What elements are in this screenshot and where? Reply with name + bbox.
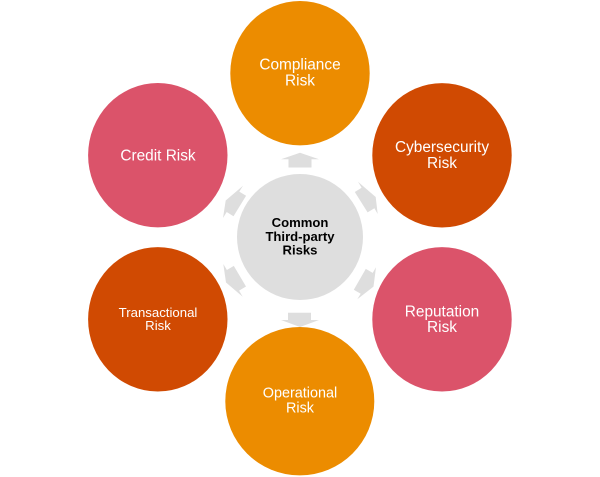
circle: cybersecurity risk: Risk (427, 155, 457, 172)
arrow: to compliance risk (281, 153, 319, 168)
circle: compliance risk: Compliance (259, 57, 341, 74)
circle: credit risk (88, 83, 228, 227)
circle: credit risk: Credit Risk (120, 147, 196, 164)
center circle: common third-party risks: Risks (283, 242, 317, 257)
circle: operational risk: Operational (263, 386, 337, 402)
circle: compliance risk: Risk (285, 73, 315, 90)
circle: transactional risk (88, 247, 228, 392)
circle: operational risk (225, 327, 374, 475)
circle: reputation risk (372, 247, 512, 392)
circle: compliance risk (230, 1, 370, 145)
center circle: common third-party risks: Common (272, 215, 328, 230)
arrow: to transactional risk (223, 264, 246, 297)
arrow: to reputation risk (354, 267, 376, 299)
circle: reputation risk: Risk (427, 319, 457, 336)
circle: cybersecurity risk: Cybersecurity (395, 139, 489, 156)
circle: transactional risk: Risk (145, 318, 171, 333)
arrow: to cybersecurity risk (355, 182, 378, 214)
circle: reputation risk: Reputation (405, 304, 479, 321)
center circle: common third-party risks (237, 174, 363, 300)
arrow: to operational risk (281, 313, 319, 327)
circle: cybersecurity risk (372, 83, 512, 228)
center circle: common third-party risks: Third-party (265, 229, 335, 244)
arrow: to credit risk (223, 186, 246, 218)
circle: transactional risk: Transactional (119, 305, 197, 320)
circle: operational risk: Risk (286, 401, 315, 417)
